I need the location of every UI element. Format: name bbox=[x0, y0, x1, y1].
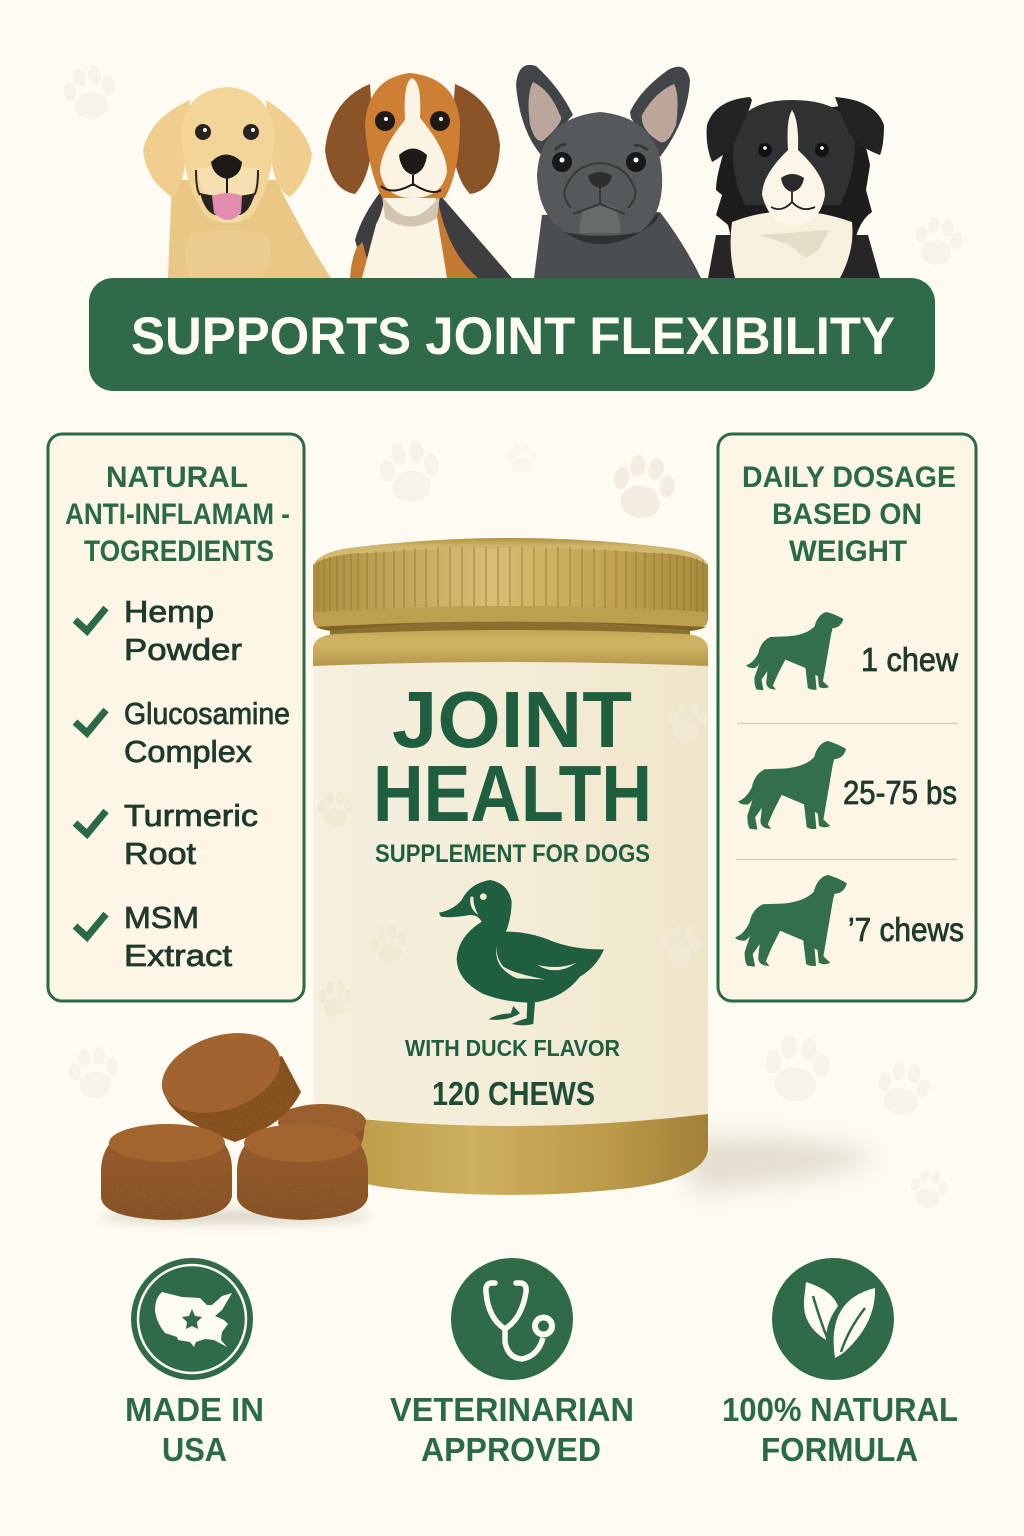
dosage row: medium dog: 25-75 bs bbox=[843, 774, 957, 811]
banner title: SUPPORTS JOINT FLEXIBILITY bbox=[131, 307, 895, 366]
label: made in usa: USA bbox=[162, 1431, 227, 1468]
jar label bbox=[313, 662, 708, 1126]
label: natural formula bbox=[722, 1391, 958, 1468]
ingredient: turmeric root bbox=[75, 798, 258, 871]
icon: stethoscope bbox=[451, 1258, 573, 1380]
chews bbox=[100, 1019, 370, 1224]
product jar bbox=[313, 538, 709, 1195]
label: veterinarian approved: VETERINARIAN bbox=[390, 1391, 634, 1428]
icon: usa map bbox=[131, 1258, 253, 1380]
ingredient: glucosamine complex: Complex bbox=[124, 734, 253, 769]
label title: JOINT bbox=[392, 675, 632, 764]
label: veterinarian approved: APPROVED bbox=[421, 1431, 601, 1468]
ingredients heading: ANTI-INFLAMAM - bbox=[65, 498, 290, 531]
icon: duck bbox=[439, 880, 604, 1025]
dog: beagle bbox=[325, 73, 512, 278]
label paw prints bbox=[318, 700, 709, 1017]
label: made in usa bbox=[125, 1391, 264, 1468]
dosage heading: BASED ON bbox=[772, 498, 922, 531]
chew: right bbox=[237, 1124, 368, 1220]
ingredient: hemp powder: Hemp bbox=[124, 594, 214, 629]
label: made in usa: MADE IN bbox=[125, 1391, 264, 1428]
label flavor: WITH DUCK FLAVOR bbox=[405, 1035, 620, 1061]
label subtitle: SUPPLEMENT FOR DOGS bbox=[375, 840, 650, 868]
label: veterinarian approved bbox=[390, 1391, 634, 1468]
badge: made in usa bbox=[125, 1258, 264, 1468]
dosage heading: DAILY DOSAGE bbox=[742, 461, 956, 494]
panel: dosage bbox=[718, 434, 976, 1001]
badge: veterinarian approved bbox=[390, 1258, 634, 1468]
lid ridges bbox=[318, 547, 703, 612]
icon: leaves bbox=[772, 1258, 894, 1380]
dosage heading: WEIGHT bbox=[789, 535, 907, 568]
ingredient: msm extract bbox=[75, 900, 232, 973]
label: natural formula: 100% NATURAL bbox=[722, 1391, 958, 1428]
dosage row: medium dog bbox=[738, 741, 957, 830]
jar lid underside shadow bbox=[330, 612, 690, 640]
chew: left bbox=[101, 1124, 232, 1220]
dog: golden retriever bbox=[143, 87, 331, 278]
chew: back bbox=[278, 1104, 366, 1170]
dosage row: small dog bbox=[746, 612, 958, 690]
label title: HEALTH bbox=[373, 749, 652, 838]
ingredients heading: TOGREDIENTS bbox=[84, 535, 274, 568]
dog: border collie bbox=[707, 97, 884, 278]
ingredient: turmeric root: Turmeric bbox=[124, 798, 258, 833]
ingredient: hemp powder: Powder bbox=[124, 632, 242, 667]
ingredients heading: NATURAL bbox=[106, 461, 248, 494]
ingredient: glucosamine complex: Glucosamine bbox=[124, 696, 290, 731]
dosage row: small dog: 1 chew bbox=[861, 641, 958, 678]
ingredient: msm extract: Extract bbox=[124, 938, 232, 973]
badge: natural formula bbox=[722, 1258, 958, 1468]
chew: tilted top bbox=[152, 1019, 301, 1142]
label count: 120 CHEWS bbox=[432, 1075, 595, 1112]
dosage row: large dog: ’7 chews bbox=[848, 911, 964, 948]
dog: french bulldog bbox=[516, 65, 701, 278]
ingredient: glucosamine complex bbox=[75, 696, 290, 769]
ingredient: hemp powder bbox=[75, 594, 242, 667]
panel: ingredients bbox=[48, 434, 304, 1001]
dosage row: large dog bbox=[735, 875, 964, 967]
label title bbox=[373, 675, 652, 838]
banner bbox=[89, 278, 935, 391]
jar shadow bbox=[690, 1138, 875, 1192]
jar neck band bbox=[313, 630, 708, 675]
background paw prints bbox=[60, 62, 965, 1210]
dosage heading bbox=[742, 461, 956, 568]
ingredients heading bbox=[65, 461, 290, 568]
ingredient: msm extract: MSM bbox=[124, 900, 199, 935]
label: natural formula: FORMULA bbox=[761, 1431, 918, 1468]
ingredient: turmeric root: Root bbox=[124, 836, 196, 871]
jar lid bbox=[313, 538, 708, 631]
jar base bbox=[313, 1100, 708, 1195]
